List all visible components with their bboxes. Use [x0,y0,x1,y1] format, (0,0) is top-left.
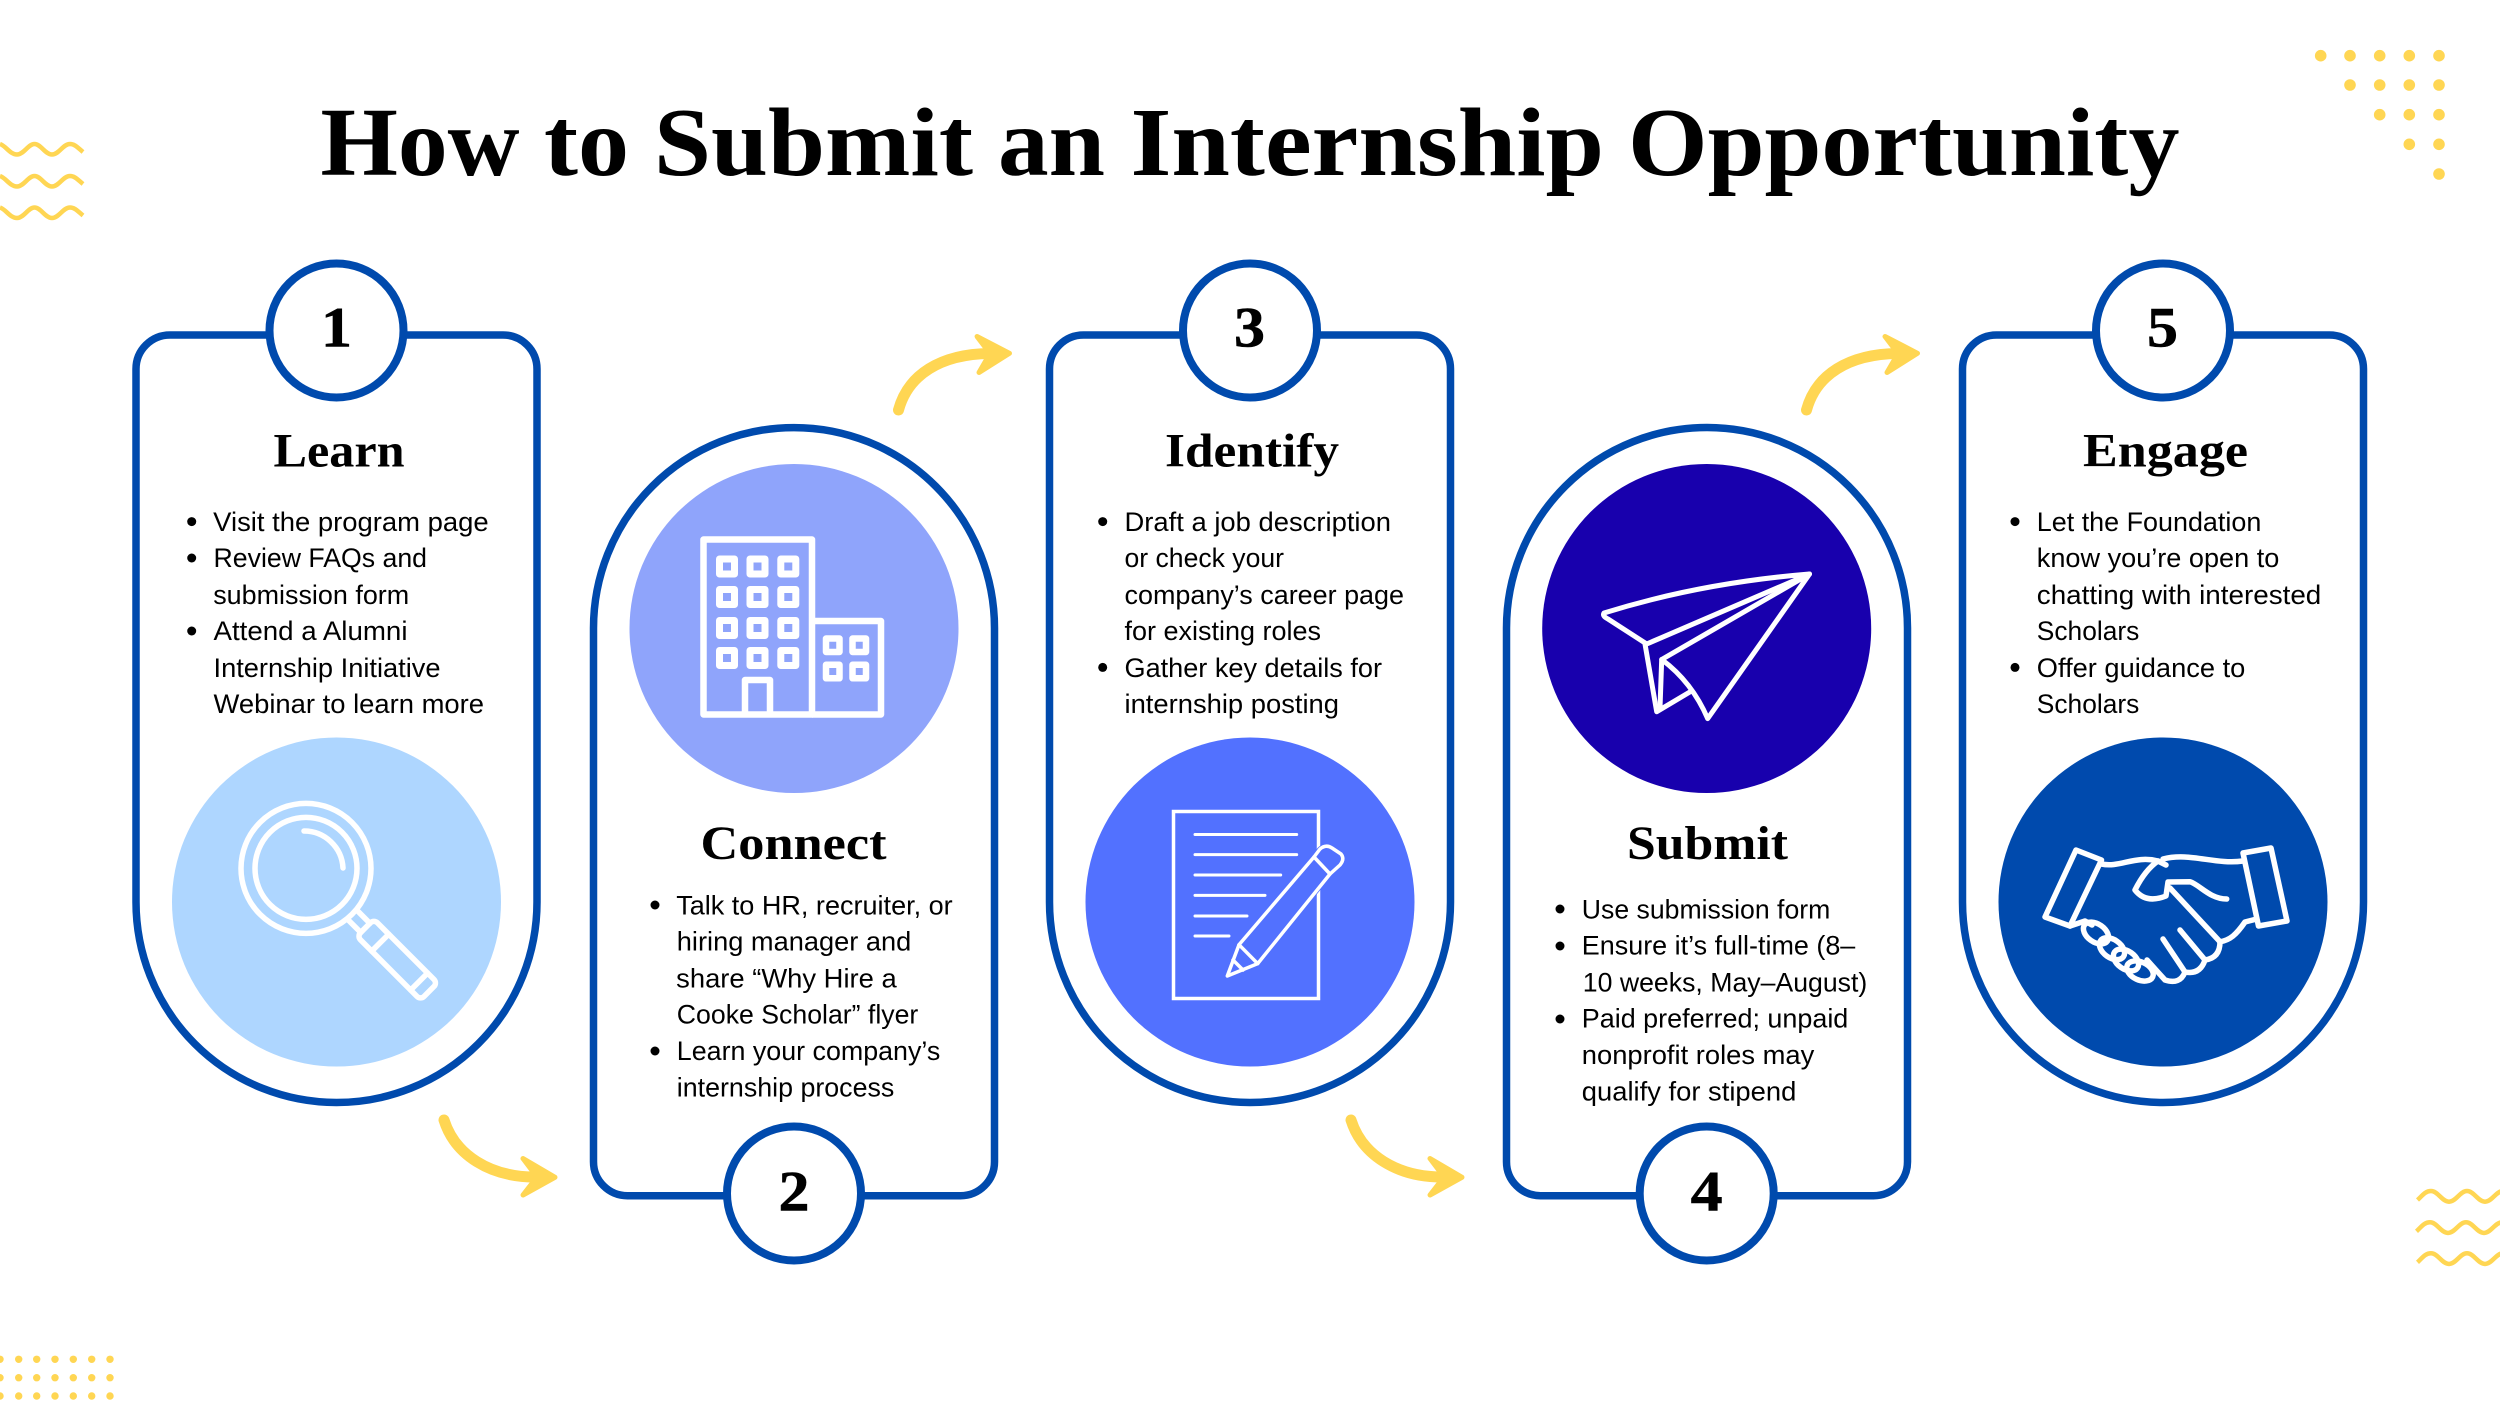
panel: step 3 Identify [1050,264,1450,1102]
panel: step 2 Connect [594,428,994,1261]
number badge 4 [1640,1126,1774,1260]
number badge 3: 3 [1234,296,1265,360]
title: an [998,89,1105,196]
bullet list: Offer guidance to [2037,653,2245,683]
bullet list [187,507,489,719]
number badge 1 [270,264,404,398]
icon circle: document and pencil [1086,738,1414,1066]
card outline [1962,335,2364,1102]
bullet list: Cooke Scholar” flyer [677,1000,918,1030]
decoration: bottom left dots [0,1356,114,1400]
arrow: step 3 to step 4 [1351,1120,1462,1195]
bullet list: Learn your company’s [677,1036,940,1066]
icon circle: handshake [1998,738,2328,1066]
arrow: step 2 to step 3 [898,336,1010,410]
panel: step 1 Learn [136,264,537,1102]
bullet list: Use submission form [1582,894,1830,924]
number badge 2: 2 [778,1161,810,1224]
heading: Submit: Submit [1627,817,1788,870]
bullet list: Visit the program page [213,507,489,537]
icon circle: office building [630,464,958,793]
bullet list: submission form [213,580,409,610]
icon circle: magnifying glass [172,738,501,1066]
bullet list: 10 weeks, May–August) [1583,968,1867,998]
number badge 3 [1183,264,1317,398]
card outline [1050,335,1450,1102]
bullet list: Gather key details for [1124,653,1382,683]
card outline [1506,428,1908,1196]
bullet list: share “Why Hire a [676,964,898,994]
bullet list: or check your [1124,543,1284,573]
bullet list: Attend a Alumni [214,616,408,646]
number badge 4: 4 [1691,1161,1723,1224]
bullet list: Talk to HR, recruiter, or [676,890,953,920]
heading: Identify: Identify [1165,424,1339,478]
bullet list [1556,894,1867,1106]
bullet list: company’s career page [1124,580,1404,610]
heading: Learn: Learn [274,424,404,478]
bullet list: Scholars [2037,616,2139,646]
panel: step 4 Submit [1506,428,1908,1261]
panel: step 5 Engage [1962,264,2364,1102]
bullet list: Webinar to learn more [214,689,484,719]
bullet list: Paid preferred; unpaid [1582,1004,1848,1034]
card outline [594,428,994,1196]
icon circle: paper plane [1542,464,1871,793]
title: Opportunity [1628,89,2180,196]
number badge 1: 1 [321,296,352,360]
heading: Connect: Connect [700,817,887,870]
bullet list: internship posting [1124,689,1339,719]
bullet list: Draft a job description [1124,507,1391,537]
number badge 2 [727,1126,861,1260]
bullet list: Scholars [2037,689,2139,719]
title: to [544,89,629,196]
number badge 5: 5 [2147,296,2178,360]
bullet list: Review FAQs and [214,543,427,573]
arrow: step 4 to step 5 [1806,336,1918,410]
decoration: top right dot triangle [2315,50,2445,180]
arrow: step 1 to step 2 [444,1120,555,1195]
bullet list: Let the Foundation [2037,507,2261,537]
title: Internship [1130,89,1604,196]
title: How [320,89,520,196]
heading: Engage: Engage [2083,424,2248,478]
title: Submit [654,89,973,196]
bullet list: chatting with interested [2037,580,2321,610]
bullet list [1098,507,1404,719]
bullet list: Internship Initiative [214,653,440,683]
number badge 5 [2096,264,2230,398]
bullet list: Ensure it’s full-time (8– [1582,930,1855,960]
bullet list [2010,507,2321,719]
bullet list: hiring manager and [677,926,911,956]
bullet list: qualify for stipend [1582,1076,1796,1106]
card outline [136,335,537,1102]
bullet list: internship process [677,1072,894,1102]
bullet list: for existing roles [1124,616,1321,646]
decoration: right waves [2416,1191,2500,1264]
bullet list: nonprofit roles may [1582,1040,1815,1070]
bullet list: know you’re open to [2037,543,2279,573]
bullet list [650,890,953,1102]
decoration: left waves [0,144,83,218]
